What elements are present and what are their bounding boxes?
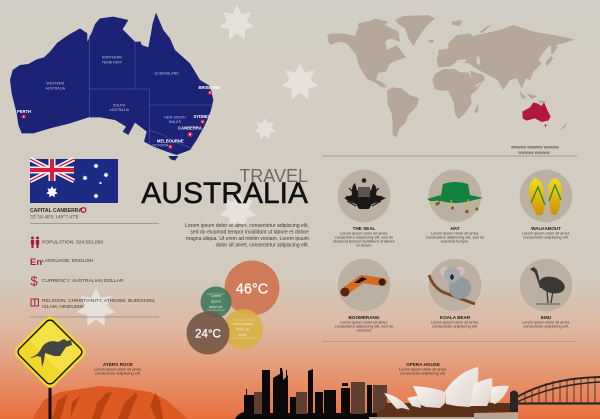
capital: CAPITAL CANBERRA xyxy=(30,208,82,214)
climate bubbles: 24°C xyxy=(195,328,221,340)
map: Australia states: AUSTRALIA xyxy=(45,86,66,90)
currency: $ xyxy=(30,274,38,288)
captions row 1: WALKABOUT xyxy=(531,226,561,231)
map: Australia states: SOUTH xyxy=(113,103,126,107)
icon circles row 1 xyxy=(338,170,572,222)
climate bubbles: ipsum xyxy=(211,300,221,304)
map: Australia states: TERRITORY xyxy=(102,60,123,64)
flag of Australia xyxy=(30,159,118,203)
captions row 2: Lorem ipsum dolor sit amet, xyxy=(340,320,388,324)
icon: emu xyxy=(530,267,567,304)
religion xyxy=(31,298,155,310)
icon: hat xyxy=(427,182,483,213)
climate bubbles: amet. xyxy=(238,333,248,337)
captions row 2: KOALA BEAR xyxy=(440,315,471,320)
icon: flip flops xyxy=(529,178,562,216)
captions row 2: EMU xyxy=(541,315,552,320)
Opera House caption: Lorem ipsum dolor sit amet, xyxy=(399,366,447,372)
icon: the seal xyxy=(344,178,386,209)
intro text: Lorem ipsum dolor sit amet, consectetur adipiscing elit, xyxy=(185,223,309,229)
map: Australia states: CANBERRA xyxy=(178,125,202,130)
icon circles row 2 xyxy=(338,259,572,311)
currency xyxy=(30,274,124,288)
climate bubbles: dolor sit. xyxy=(236,328,250,332)
climate bubbles: 46°C xyxy=(236,282,268,298)
map: Australia states: AUSTRALIA xyxy=(109,108,130,112)
language xyxy=(30,257,94,268)
capital xyxy=(30,208,86,220)
map: Australia states: NEW SOUTH xyxy=(164,115,186,119)
Opera House caption xyxy=(399,362,447,376)
climate bubbles: Lorem xyxy=(211,294,221,298)
Harbour Bridge xyxy=(510,377,600,412)
Opera House caption: consectetur adipiscing elit. xyxy=(400,370,446,376)
captions row 2: consectetur adipiscing elit. xyxy=(432,324,478,328)
map: Australia states: QUEENSLAND xyxy=(155,72,179,76)
captions row 2: BOOMERANG xyxy=(349,315,380,320)
intro text: dolor sit amet, consectetur adipiscing elit. xyxy=(216,242,309,248)
map: Australia states: WALES xyxy=(169,120,182,124)
map: Australia states: WESTERN xyxy=(47,82,65,86)
captions row 2: Lorem ipsum dolor sit amet, xyxy=(522,320,570,324)
climate bubbles: dolor sit. xyxy=(209,305,223,309)
city skyline xyxy=(235,368,387,419)
title: AUSTRALIA xyxy=(141,177,308,210)
captions row 1: HAT xyxy=(450,226,460,231)
capital: 35°18.48'S 149°7.47'E xyxy=(30,214,80,220)
title: TRAVEL xyxy=(239,166,308,186)
intro text: sed do eiusmod tempor incididunt ut labore et dolore xyxy=(190,230,309,236)
Ayers Rock caption xyxy=(94,362,142,376)
world map legend xyxy=(511,144,560,155)
captions row 1: THE SEAL xyxy=(353,226,376,231)
captions row 1: Lorem ipsum dolor sit amet, xyxy=(340,230,388,236)
map: Australia states: VICTORIA xyxy=(152,144,169,148)
Ayers Rock caption: AYERS ROCK xyxy=(103,362,134,367)
map: Australia states: BRISBANE xyxy=(198,85,220,90)
population xyxy=(31,236,103,248)
map: Australia states: MELBOURNE xyxy=(157,139,184,144)
captions row 1: eiusmod tempor. xyxy=(441,238,469,244)
map: Australia states: PERTH xyxy=(17,109,31,114)
Opera House caption: OPERA HOUSE xyxy=(406,362,440,367)
map: Australia states: NORTHERN xyxy=(102,56,122,60)
captions row 1 xyxy=(333,226,570,248)
captions row 2: Lorem ipsum dolor sit amet, xyxy=(431,320,479,324)
intro text: magna aliqua. Ut enim ad minim veniam. Lorem ipsum xyxy=(186,236,309,242)
icon: koala xyxy=(429,266,475,304)
religion: RELIGION: CHRISTIANITY, ATHEISM, BUDDHISM, xyxy=(42,298,155,304)
captions row 1: consectetur adipiscing elit. xyxy=(523,234,569,240)
currency: CURRENCY: AUSTRALIAN DOLLAR xyxy=(42,278,124,284)
captions row 2: consectetur adipiscing elit, sed do xyxy=(335,324,393,328)
captions row 2: eiusmod xyxy=(357,328,371,332)
map: Australia states xyxy=(10,13,220,161)
population: POPULATION: 324,561,000 xyxy=(42,240,103,246)
captions row 1: Lorem ipsum dolor sit amet, xyxy=(431,230,479,236)
world map xyxy=(327,15,575,137)
Ayers Rock caption: consectetur adipiscing elit. xyxy=(95,370,141,376)
captions row 2: consectetur adipiscing elit. xyxy=(523,324,569,328)
Sydney Opera House xyxy=(369,367,518,419)
captions row 2 xyxy=(335,315,570,332)
intro text xyxy=(185,223,309,248)
map: Australia states: SYDNEY xyxy=(193,114,211,119)
kangaroo road sign xyxy=(12,314,88,419)
captions row 1: et dolore xyxy=(356,242,372,248)
language: En xyxy=(30,257,42,268)
world map legend: wwwww wwwww wwwww xyxy=(511,144,560,150)
captions row 1: eiusmod tempor incididunt ut labore xyxy=(333,238,395,244)
climate bubbles: Lorem ipsum xyxy=(233,322,253,326)
language: LANGUAGE: ENGLISH xyxy=(42,258,94,264)
religion: ISLAM, HINDUISM xyxy=(42,304,84,310)
captions row 1: Lorem ipsum dolor sit amet, xyxy=(522,230,570,236)
captions row 1: consectetur adipiscing elit, sed do xyxy=(335,234,393,240)
icon: boomerang xyxy=(340,277,386,296)
Ayers Rock caption: Lorem ipsum dolor sit amet, xyxy=(94,366,142,372)
Ayers Rock xyxy=(32,386,188,419)
climate bubbles xyxy=(186,260,280,354)
world map legend: wwwww wwwww xyxy=(518,150,551,155)
captions row 1: consectetur adipiscing elit, sed do xyxy=(426,234,484,240)
